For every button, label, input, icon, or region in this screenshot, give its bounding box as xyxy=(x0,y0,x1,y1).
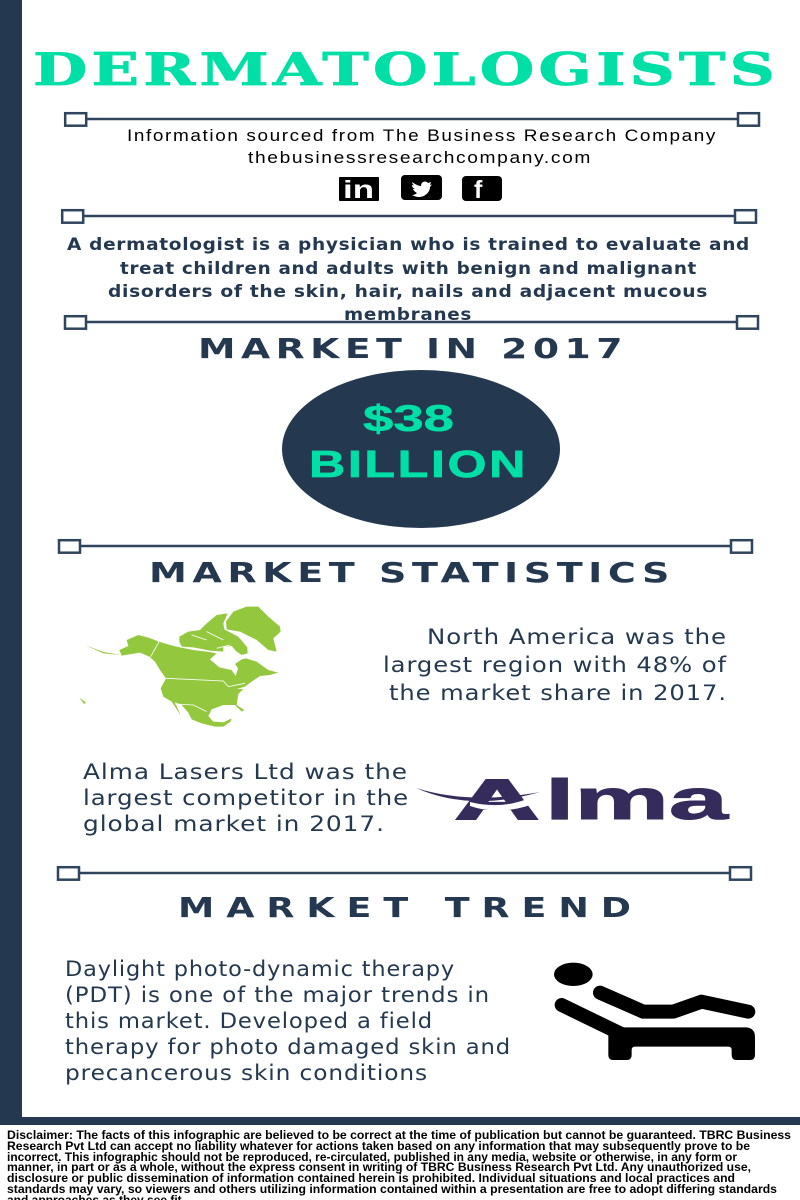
disclaimer: disclosure or public dissemination of information contained herein is prohibited. Individual situations and local practices and xyxy=(7,1171,735,1185)
disclaimer: standards may vary, so viewers and others utilizing information contained within a presentation are free to adopt differing standards xyxy=(7,1182,777,1196)
source text: thebusinessresearchcompany.com xyxy=(248,149,592,167)
heading: market in 2017: MARKET IN 2017 xyxy=(198,333,628,365)
heading: market statistics: MARKET STATISTICS xyxy=(149,557,675,589)
left sidebar xyxy=(0,0,22,1125)
icon: linkedin xyxy=(339,176,379,204)
icon: person on treatment bed xyxy=(554,963,755,1060)
icon: facebook xyxy=(462,176,502,204)
disclaimer: Research Pvt Ltd can accept no liability whatever for actions taken based on any information that may subsequently prove to be xyxy=(7,1139,750,1153)
logo: alma: A xyxy=(455,768,539,832)
trend text: Daylight photo-dynamic therapy xyxy=(65,957,455,981)
disclaimer: Disclaimer: The facts of this infographic are believed to be correct at the time of publication but cannot be guaranteed. TBRC Business xyxy=(7,1128,791,1142)
stat text: north america: North America was the xyxy=(427,625,727,649)
disclaimer: incorrect. This infographic should not be reproduced, re-circulated, published in any media, website or otherwise, in any form or xyxy=(7,1150,737,1164)
map: north america xyxy=(79,607,281,727)
market size circle: BILLION xyxy=(309,444,528,486)
source text: Information sourced from The Business Research Company xyxy=(127,127,717,145)
icon: facebook: f xyxy=(474,176,483,204)
icon: linkedin: in xyxy=(343,176,374,204)
definition text: membranes xyxy=(344,305,472,324)
logo: alma: lma xyxy=(545,768,730,832)
stat text: alma lasers xyxy=(83,760,409,836)
social icons xyxy=(339,175,502,204)
disclaimer: manner, in part or as a whole, without the express consent in writing of TBRC Business Research Pvt Ltd. Any unauthorized use, xyxy=(7,1160,751,1174)
definition text: disorders of the skin, hair, nails and adjacent mucous xyxy=(108,282,708,301)
market size circle xyxy=(282,370,560,528)
stat text: alma lasers: largest competitor in the xyxy=(83,786,409,810)
disclaimer xyxy=(7,1128,791,1200)
icon: twitter xyxy=(401,175,442,200)
stat text: alma lasers: Alma Lasers Ltd was the xyxy=(83,760,408,784)
heading: market trend: MARKET TREND xyxy=(178,892,643,924)
bottom band xyxy=(0,1117,800,1125)
stat text: north america: the market share in 2017. xyxy=(389,681,727,705)
trend text: (PDT) is one of the major trends in xyxy=(65,983,490,1007)
stat text: north america xyxy=(383,625,727,705)
definition text: treat children and adults with benign and malignant xyxy=(120,259,697,278)
stat text: alma lasers: global market in 2017. xyxy=(83,812,385,836)
trend text: therapy for photo damaged skin and xyxy=(65,1035,511,1059)
trend text xyxy=(65,957,511,1085)
trend text: precancerous skin conditions xyxy=(65,1061,428,1085)
trend text: this market. Developed a field xyxy=(65,1009,433,1033)
definition text xyxy=(67,235,750,324)
source text xyxy=(127,127,717,167)
market size circle: $38 xyxy=(363,398,454,439)
definition text: A dermatologist is a physician who is trained to evaluate and xyxy=(67,235,750,254)
logo: alma xyxy=(416,768,730,832)
stat text: north america: largest region with 48% of xyxy=(383,653,727,677)
title: DERMATOLOGISTS xyxy=(33,43,779,96)
